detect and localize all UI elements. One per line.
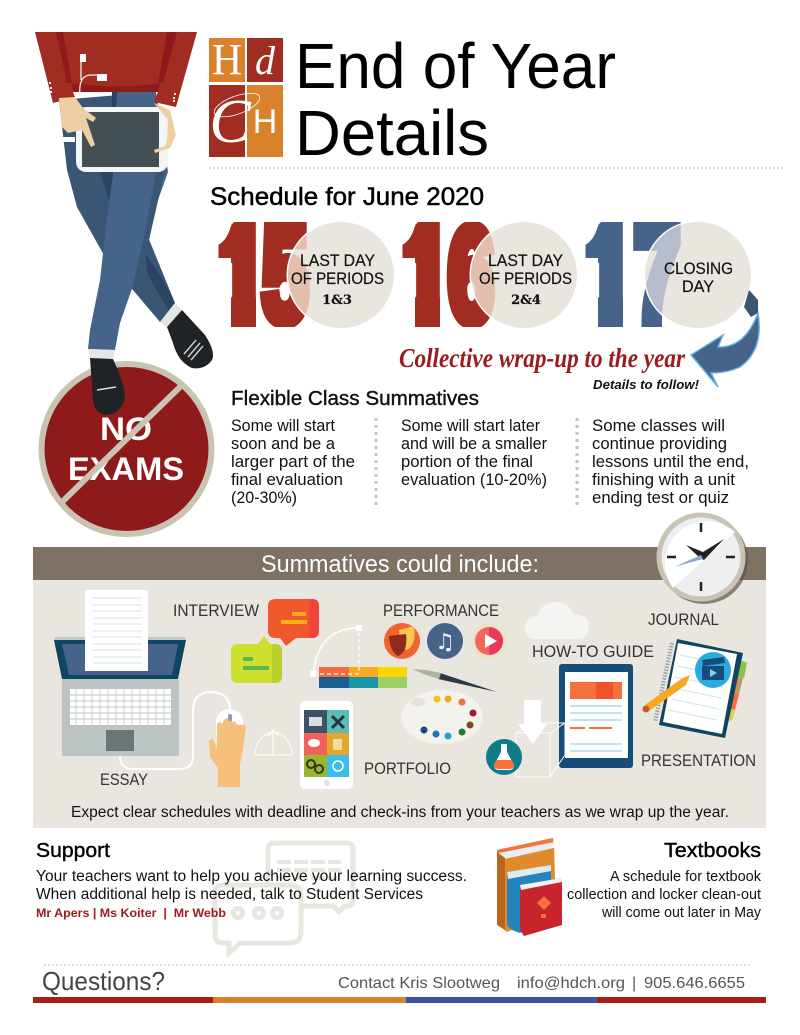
support section: Support — [36, 840, 110, 862]
date 16: 1 — [403, 201, 449, 350]
date 15: 1 — [219, 201, 265, 350]
questions footer: Questions? — [42, 966, 165, 996]
contact details — [338, 975, 745, 992]
date 16: 6 — [448, 201, 494, 350]
column 3: lessons until the end, — [592, 453, 749, 471]
column 2: evaluation (10-20%) — [401, 471, 547, 489]
contact details: Contact Kris Slootweg — [338, 975, 500, 992]
label: 2&4 — [511, 293, 541, 308]
date 16: 6 — [448, 201, 494, 350]
title — [295, 30, 616, 169]
back shoe — [160, 303, 182, 327]
date 15: 5 — [262, 201, 308, 350]
title: Details — [295, 97, 489, 169]
label: OF PERIODS — [479, 270, 572, 288]
column 1 — [231, 417, 355, 507]
logo: d — [255, 38, 276, 83]
icon: cloud — [525, 602, 589, 639]
title: End of Year — [295, 30, 616, 102]
flexible class summatives — [231, 388, 749, 507]
icon: performance circles: ♫ — [435, 630, 455, 655]
label: 1&3 — [322, 293, 352, 308]
item labels: ESSAY — [100, 770, 148, 789]
footer colour bar — [33, 997, 766, 1003]
item labels: PORTFOLIO — [364, 759, 451, 778]
column 1: larger part of the — [231, 453, 355, 471]
date 17 — [586, 222, 751, 328]
icon: phone portfolio — [300, 701, 353, 789]
textbooks body: collection and locker clean-out — [567, 886, 762, 903]
icon: gantt chart — [310, 625, 407, 688]
summatives panel — [33, 515, 766, 828]
column 2: portion of the final — [401, 453, 533, 471]
date 17: 1 — [586, 201, 632, 350]
logo — [209, 35, 283, 157]
item labels: INTERVIEW — [173, 601, 259, 620]
column 1: final evaluation — [231, 471, 343, 489]
date 16 — [402, 222, 577, 328]
column 3: Some classes will — [592, 417, 725, 435]
column 1: Some will start — [231, 417, 335, 435]
column 3: continue providing — [592, 435, 727, 453]
back leg — [59, 92, 175, 322]
column 1: soon and be a — [231, 435, 335, 453]
jacket buttons — [50, 82, 175, 102]
icon: interview bubbles — [231, 599, 319, 683]
column 2 — [401, 417, 548, 489]
wrap-up callout — [399, 343, 700, 392]
panel header — [33, 547, 766, 580]
no exams text — [68, 411, 184, 487]
icon: how-to tablet — [559, 664, 633, 768]
icon: paint brush and palette — [401, 669, 497, 744]
questions footer — [42, 966, 745, 996]
column 3 — [592, 417, 749, 507]
date 15 — [218, 222, 394, 328]
label: OF PERIODS — [291, 270, 384, 288]
schedule heading: Schedule for June 2020 — [210, 183, 484, 211]
icon: laptop with essay — [54, 590, 230, 769]
label: DAY — [682, 278, 714, 296]
student figure — [35, 32, 213, 415]
no exams sign — [42, 364, 212, 534]
panel header: Summatives could include: — [261, 551, 539, 578]
contact details: 905.646.6655 — [644, 975, 745, 992]
label: CLOSING — [664, 260, 733, 278]
label: LAST DAY — [300, 252, 375, 270]
column 2: and will be a smaller — [401, 435, 548, 453]
label — [664, 260, 733, 296]
no exams text: EXAMS — [68, 451, 184, 487]
icon: support chat watermark — [215, 843, 353, 953]
expect note: Expect clear schedules with deadline and check-ins from your teachers as we wrap up the year. — [71, 804, 729, 821]
wrap-up callout: Collective wrap-up to the year — [399, 343, 685, 373]
column 2: Some will start later — [401, 417, 541, 435]
item labels: PERFORMANCE — [383, 601, 499, 620]
front shoe — [88, 349, 115, 360]
item labels: HOW-TO GUIDE — [532, 642, 654, 661]
support body — [36, 868, 467, 903]
front leg — [88, 92, 168, 350]
support section — [36, 840, 467, 920]
column 3: ending test or quiz — [592, 489, 729, 507]
contact details: info@hdch.org — [517, 975, 625, 992]
curved arrow — [691, 290, 759, 387]
flexible class summatives: Flexible Class Summatives — [231, 388, 479, 410]
label — [479, 252, 572, 308]
support body: When additional help is needed, talk to Student Services — [36, 886, 423, 903]
logo: C — [209, 88, 251, 156]
textbooks body: A schedule for textbook — [610, 868, 761, 885]
tablet — [76, 107, 168, 172]
icon: performance circles — [384, 623, 507, 659]
item labels: JOURNAL — [648, 610, 719, 629]
logo: H — [253, 103, 277, 141]
column 3: finishing with a unit — [592, 471, 736, 489]
red jacket — [35, 32, 197, 107]
hands — [59, 97, 176, 153]
label — [291, 252, 384, 308]
textbooks body: will come out later in May — [601, 904, 761, 921]
icon: notebook journal — [642, 639, 747, 738]
date 17: 7 — [634, 201, 680, 350]
dome outline — [255, 730, 292, 755]
icon: download box and flask — [486, 700, 565, 777]
date 17: 7 — [634, 201, 680, 350]
contact details: | — [632, 975, 636, 992]
clock — [659, 515, 748, 604]
item labels: PRESENTATION — [641, 751, 756, 770]
textbooks section: Textbooks — [664, 840, 761, 862]
column 1: (20-30%) — [231, 489, 297, 507]
textbooks section — [567, 840, 762, 921]
date 15: 5 — [262, 201, 308, 350]
staff names: Mr Apers | Ms Koiter | Mr Webb — [36, 906, 226, 920]
item labels — [100, 601, 756, 789]
icon: mouse and hand — [209, 709, 246, 787]
label: LAST DAY — [488, 252, 563, 270]
logo: H — [212, 35, 242, 84]
support body: Your teachers want to help you achieve your learning success. — [36, 868, 467, 885]
icon: textbooks — [497, 838, 562, 936]
textbooks body — [567, 868, 762, 921]
no exams text: NO — [100, 411, 152, 447]
wrap-up callout: Details to follow! — [593, 377, 700, 392]
earphones — [80, 55, 98, 96]
